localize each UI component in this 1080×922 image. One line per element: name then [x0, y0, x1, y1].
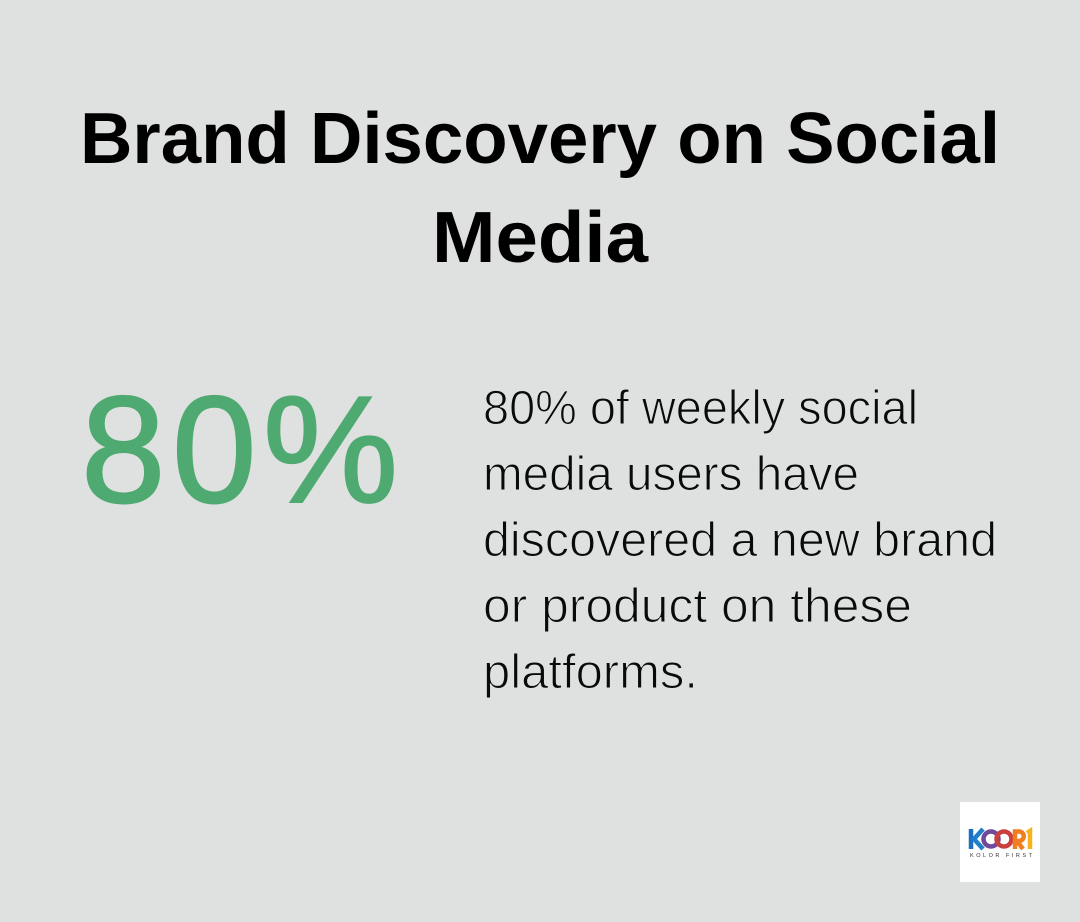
- description text: media users have: [483, 448, 859, 501]
- title: Brand Discovery on Social: [80, 99, 1000, 179]
- description text: discovered a new brand: [483, 514, 997, 567]
- description text: [483, 382, 997, 699]
- title: Media: [432, 198, 649, 278]
- description text: 80% of weekly social: [483, 382, 918, 435]
- logo: Koor1 Kolor First: KOLOR FIRST: [970, 853, 1033, 859]
- big stat: 80%: 80%: [81, 365, 398, 535]
- title: [80, 99, 1000, 278]
- description text: or product on these: [483, 580, 912, 633]
- logo: Koor1 Kolor First: [960, 802, 1040, 882]
- description text: platforms.: [483, 646, 698, 699]
